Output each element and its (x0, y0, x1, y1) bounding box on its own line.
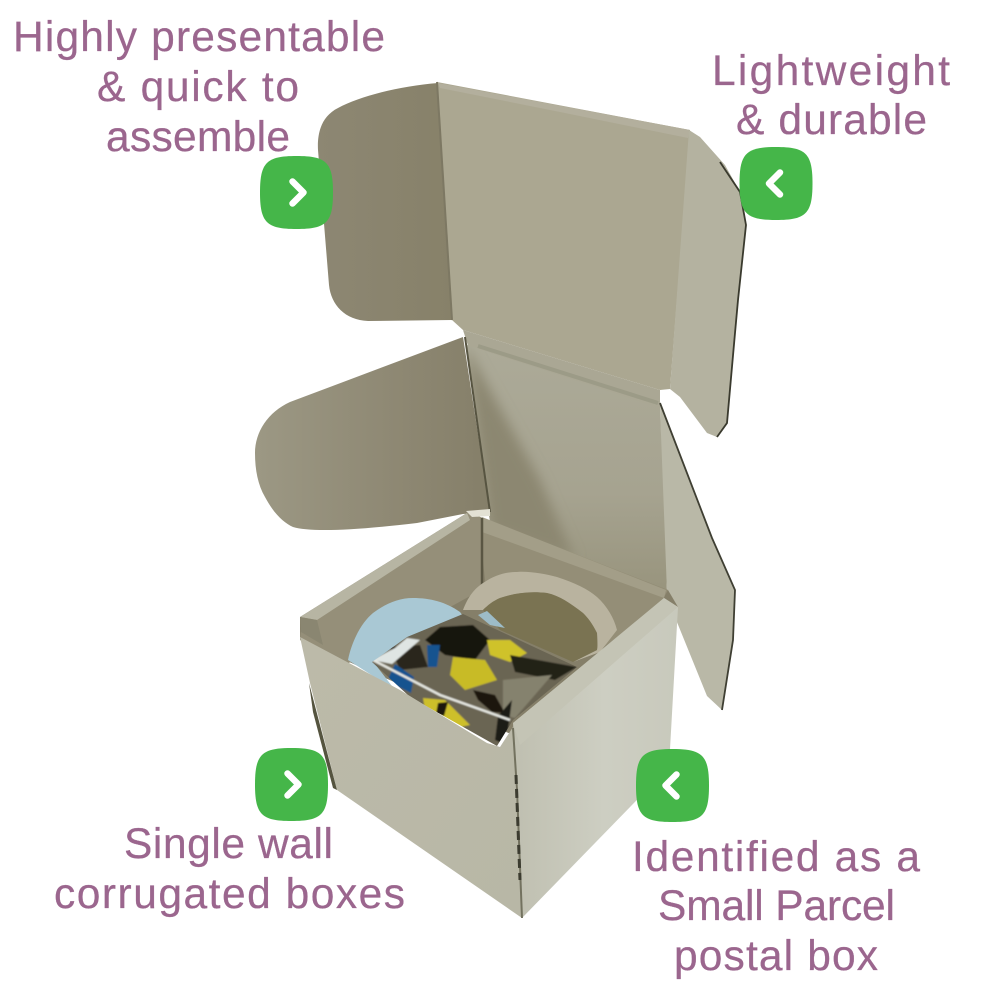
label: lightweight: & durable (736, 97, 927, 144)
left upper flap (255, 337, 490, 530)
flap dark corrugated edge (717, 162, 746, 437)
icon: chevron left, top right (740, 147, 812, 220)
label: small parcel: Identified as a (632, 834, 920, 881)
lid top edge wear (438, 83, 690, 138)
label: highly presentable: & quick to (97, 64, 299, 111)
inner corner (481, 518, 483, 590)
label: highly presentable (13, 14, 385, 161)
mug (348, 572, 617, 755)
box right face (513, 598, 678, 918)
hinge band (463, 330, 660, 410)
box interior base (300, 513, 678, 735)
label: highly presentable: Highly presentable (13, 14, 385, 61)
top-left lid flap (318, 83, 452, 321)
label: highly presentable: assemble (106, 114, 290, 161)
back panel (467, 345, 667, 592)
back panel shadow wedge (468, 353, 571, 552)
front-left side flap (309, 683, 337, 790)
front-left folded tab (300, 617, 323, 645)
back wall upper band (482, 517, 666, 598)
handle opening blue (478, 611, 505, 628)
label: small parcel (632, 834, 920, 980)
seam dark stitching (516, 775, 520, 880)
mug light blue base (348, 598, 463, 690)
label: lightweight (712, 48, 950, 144)
label: small parcel: postal box (674, 933, 878, 980)
icon: chevron right, bottom left (255, 748, 328, 821)
back inner wall (478, 516, 668, 650)
label: small parcel: Small Parcel (658, 883, 895, 930)
icon: chevron right, top left (260, 156, 333, 229)
mug artwork (372, 614, 577, 746)
box front-left face (300, 637, 522, 918)
label: single wall (54, 821, 405, 918)
label: single wall: Single wall (124, 821, 333, 868)
open box with mug (255, 82, 746, 918)
corner seam (513, 728, 522, 918)
white tab highlight (466, 509, 490, 517)
mug handle (463, 572, 617, 662)
label: single wall: corrugated boxes (54, 871, 405, 918)
right face rim (513, 598, 678, 745)
label: lightweight: Lightweight (712, 48, 950, 95)
flap fold line (465, 337, 490, 512)
right lid flap (670, 130, 746, 437)
left wall rim (300, 513, 470, 620)
left inner wall (300, 513, 482, 664)
lower right flap dark edge (660, 403, 735, 710)
lid main panel (437, 82, 690, 390)
hinge band stripe (478, 346, 658, 403)
icon: chevron left, bottom right (636, 749, 709, 822)
lower right flap (660, 403, 735, 710)
mug handle inner shadow (483, 592, 597, 662)
lid fold line (437, 82, 452, 320)
